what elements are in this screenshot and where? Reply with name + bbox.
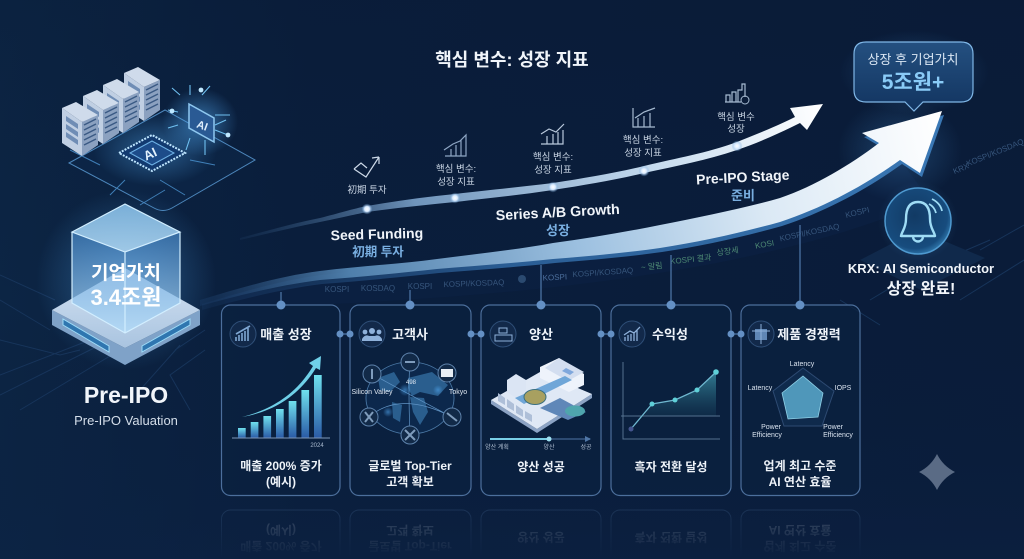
- radar chart: [748, 361, 853, 439]
- bar chart: [232, 356, 330, 449]
- icon: product: [748, 321, 774, 347]
- icon: production: [490, 321, 516, 347]
- world map with customer nodes: [351, 353, 467, 444]
- listing complete text: [848, 261, 994, 298]
- milestone 3 label: [533, 124, 573, 176]
- progress timeline: 양산 계획: [485, 443, 509, 451]
- icon: sparkle: [919, 454, 955, 490]
- stage label: seed funding: Seed Funding: [330, 225, 423, 243]
- panel: customers: [336, 300, 471, 496]
- ticker band: KOSPI: [844, 205, 870, 220]
- world map with customer nodes: Tokyo: [449, 389, 467, 396]
- panel: revenue growth: 매출 성장: [260, 327, 312, 342]
- ticker band: ~ 알림: [641, 260, 663, 272]
- stage label: seed funding: 初期 투자: [352, 244, 404, 259]
- world map with customer nodes: 498: [406, 380, 417, 386]
- icon: AI chip: AI: [141, 144, 159, 163]
- radar chart: Efficiency: [823, 432, 853, 439]
- milestone 3 label: 성장 지표: [534, 165, 572, 176]
- ticker band: 상장세: [716, 245, 739, 258]
- icon: AI chip: [119, 135, 185, 171]
- card reflections: 양산 성공: [517, 530, 565, 544]
- milestone 1 label: 初期 투자: [347, 184, 387, 196]
- ticker band: KOSPI/KOSDAQ: [572, 266, 634, 279]
- card reflections: 업계 최고 수준: [764, 539, 836, 553]
- stage label: series A/B: [495, 202, 620, 238]
- ticker band: KOSPI/KOSDAQ: [965, 137, 1024, 168]
- milestone 4 label: 핵심 변수:: [623, 134, 663, 146]
- stage label: pre-IPO: [696, 167, 790, 203]
- progress timeline: 양산: [543, 443, 555, 451]
- panel: profitability: 수익성: [652, 327, 688, 342]
- panel: profitability: 흑자 전환 달성: [635, 459, 707, 474]
- milestone 2 label: [436, 135, 476, 188]
- panel: mass production: [468, 300, 601, 496]
- panel: mass production: 양산 성공: [517, 460, 565, 474]
- world map with customer nodes: Silicon Valley: [351, 389, 393, 396]
- listing complete text: KRX: AI Semiconductor: [848, 261, 994, 276]
- card reflections: AI 연산 효율: [769, 523, 831, 537]
- panel: customers: 고객사: [392, 327, 428, 342]
- panel: mass production: 양산: [529, 327, 553, 342]
- panel: product competitiveness: AI 연산 효율: [769, 475, 831, 489]
- panel: revenue growth: 매출 200% 증가: [240, 458, 322, 473]
- panel: revenue growth: (예시): [266, 475, 296, 489]
- radar chart: Latency: [748, 385, 773, 392]
- milestone 2 label: 성장 지표: [437, 177, 475, 188]
- milestone 5 label: 성장: [727, 124, 745, 135]
- stage label: pre-IPO: 준비: [731, 188, 755, 203]
- milestone 1 label: [347, 157, 387, 196]
- panel: revenue growth: [222, 300, 340, 496]
- panel: product competitiveness: 제품 경쟁력: [777, 327, 841, 342]
- icon: bell: [860, 181, 985, 290]
- card reflections: (예시): [266, 523, 296, 537]
- panel: product competitiveness: [728, 300, 860, 496]
- Pre-IPO heading: Pre-IPO Valuation: [74, 413, 178, 428]
- panel: customers: 글로벌 Top-Tier: [368, 459, 452, 473]
- ticker band: KOSPI/KOSDAQ: [443, 278, 505, 289]
- progress timeline: 성공: [580, 443, 592, 451]
- platform: [52, 268, 200, 365]
- listing complete text: 상장 완료!: [887, 280, 955, 298]
- card reflections: 고객 확보: [386, 523, 434, 538]
- icon: small AI chip: [162, 85, 238, 156]
- ticker band: KRX: [952, 161, 971, 176]
- callout: post-listing valuation: 상장 후 기업가치: [868, 52, 958, 67]
- servers: [62, 67, 160, 156]
- upper milestone arrow: [240, 104, 823, 240]
- illustration: servers and AI chips: [62, 67, 255, 210]
- ticker band: KOSPI: [542, 272, 567, 283]
- radar chart: Power: [761, 424, 782, 431]
- ticker band: KOSPI: [325, 285, 349, 294]
- line chart: [621, 362, 720, 439]
- ticker band: KOSPI 결과: [670, 252, 712, 266]
- panel: customers: 고객 확보: [386, 474, 434, 489]
- card reflections: 흑자 전환 달성: [635, 530, 707, 545]
- title: 핵심 변수: 성장 지표: [435, 50, 589, 70]
- ticker band: KOSPI/KOSDAQ: [779, 222, 840, 243]
- bar chart: 2024: [310, 443, 324, 449]
- icon: customers: [359, 321, 385, 347]
- milestone 4 label: 성장 지표: [624, 148, 662, 159]
- radar chart: Efficiency: [752, 432, 782, 439]
- stage label: series A/B: Series A/B Growth: [495, 202, 620, 224]
- illustration: valuation cube: [36, 190, 216, 370]
- progress timeline: [485, 436, 592, 451]
- card reflections: 글로벌 Top-Tier: [368, 539, 452, 553]
- milestone 5 label: [717, 84, 755, 135]
- ticker band: [225, 137, 1024, 308]
- milestone 3 label: 핵심 변수:: [533, 151, 573, 163]
- main growth arrow: [200, 98, 962, 310]
- callout: post-listing valuation: [839, 30, 989, 114]
- radar chart: Latency: [790, 361, 815, 368]
- card reflections: [221, 510, 860, 550]
- milestone 5 label: 핵심 변수: [717, 111, 755, 123]
- ticker band: KOSI: [754, 238, 775, 251]
- icon: small AI chip: AI: [195, 119, 209, 134]
- milestone 2 label: 핵심 변수:: [436, 163, 476, 175]
- Pre-IPO heading: [74, 382, 178, 428]
- icon: profitability: [619, 321, 645, 347]
- connectors: [281, 225, 800, 334]
- milestone nodes: [362, 140, 742, 214]
- milestone 4 label: [623, 108, 663, 159]
- stage label: pre-IPO: Pre-IPO Stage: [696, 167, 790, 187]
- illustration: factory: [491, 358, 592, 433]
- radar chart: Power: [823, 424, 844, 431]
- radar chart: IOPS: [835, 385, 852, 392]
- stage label: seed funding: [330, 225, 423, 259]
- panel: product competitiveness: 업계 최고 수준: [764, 459, 836, 473]
- Pre-IPO heading: Pre-IPO: [84, 382, 168, 408]
- illustration: valuation cube: 기업가치: [91, 262, 161, 284]
- stage label: series A/B: 성장: [546, 223, 570, 238]
- ticker band: KOSDAQ: [361, 284, 395, 293]
- ticker band: KOSPI: [408, 282, 432, 291]
- illustration: valuation cube: 3.4조원: [90, 285, 162, 310]
- icon: revenue: [230, 321, 256, 347]
- panel: profitability: [598, 300, 731, 496]
- callout: post-listing valuation: 5조원+: [882, 71, 944, 94]
- card reflections: 매출 200% 증가: [240, 539, 322, 554]
